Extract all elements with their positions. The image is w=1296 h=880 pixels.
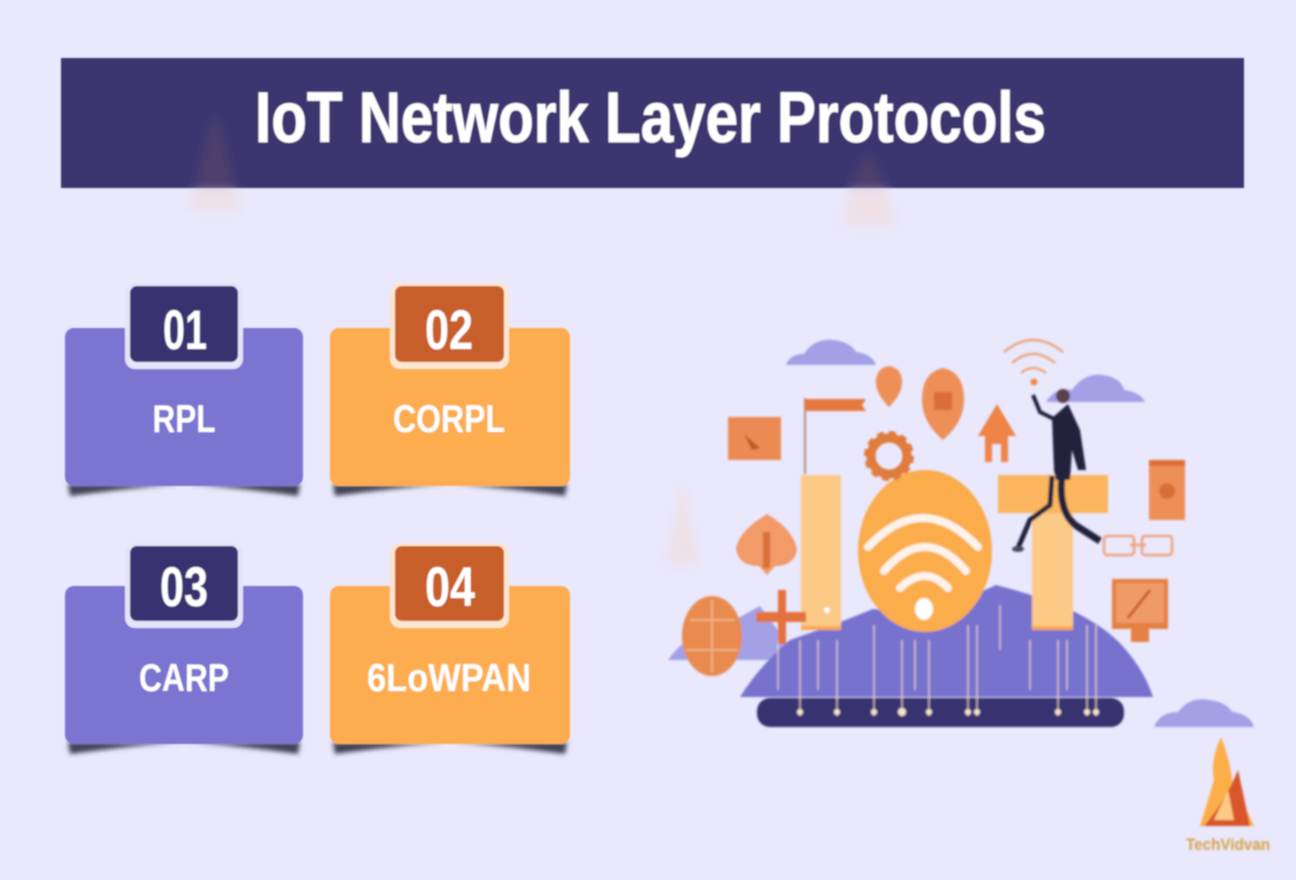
label CORPL: CORPL bbox=[393, 398, 505, 441]
icon: house bbox=[978, 404, 1016, 462]
letter I bbox=[801, 475, 841, 630]
panel: 02 CORPL bbox=[330, 283, 570, 496]
logo wordmark: TechVidvan bbox=[1186, 835, 1270, 854]
cloud: left behind globe bbox=[668, 606, 800, 660]
circuit lines bbox=[778, 605, 1096, 716]
icon: mobile device bbox=[1149, 460, 1185, 520]
icon: small map pin bbox=[876, 366, 902, 407]
faint watermark below banner bbox=[187, 190, 896, 564]
badge 01: 01 bbox=[163, 298, 207, 361]
panel: 04 6LoWPAN bbox=[330, 543, 570, 754]
illustration: IoT scene bbox=[668, 340, 1254, 727]
label 6LoWPAN: 6LoWPAN bbox=[367, 657, 531, 700]
icon: airplane bbox=[756, 590, 806, 644]
dark platform bbox=[757, 698, 1124, 727]
badge 03 bbox=[125, 543, 243, 628]
cloud: lower right bbox=[1154, 699, 1254, 727]
badge 01 bbox=[125, 283, 243, 369]
panel: 01 RPL bbox=[65, 283, 303, 496]
title banner bbox=[61, 58, 1244, 188]
icon: chain link bbox=[1104, 536, 1172, 555]
letter T bbox=[998, 475, 1108, 630]
label CARP: CARP bbox=[139, 657, 229, 700]
badge 04: 04 bbox=[425, 555, 475, 618]
flag on letter I bbox=[804, 398, 866, 474]
icon: envelope card bbox=[728, 417, 781, 460]
hill base bbox=[740, 585, 1153, 697]
badge 02: 02 bbox=[425, 298, 473, 361]
circuit nodes bbox=[797, 708, 1099, 716]
title: IoT Network Layer Protocols bbox=[255, 79, 1046, 158]
badge 03: 03 bbox=[160, 555, 208, 618]
cloud: top left bbox=[786, 340, 876, 365]
icon: cloud with arrow bbox=[736, 514, 797, 575]
logo mark bbox=[1186, 737, 1270, 854]
letter O with wifi symbol bbox=[858, 470, 992, 632]
panel: 03 CARP bbox=[65, 543, 303, 754]
icon: globe bbox=[682, 596, 742, 676]
icon: gear bbox=[866, 433, 912, 479]
cloud: top right bbox=[1046, 375, 1145, 402]
label RPL: RPL bbox=[152, 398, 216, 441]
figure: man in suit bbox=[1012, 389, 1100, 552]
icon: monitor bbox=[1112, 579, 1168, 642]
icon: wifi signal bbox=[1004, 340, 1063, 386]
icon: large map pin bbox=[922, 368, 964, 440]
badge 04 bbox=[390, 543, 509, 628]
badge 02 bbox=[390, 283, 509, 369]
faint watermark marks bbox=[195, 112, 886, 186]
